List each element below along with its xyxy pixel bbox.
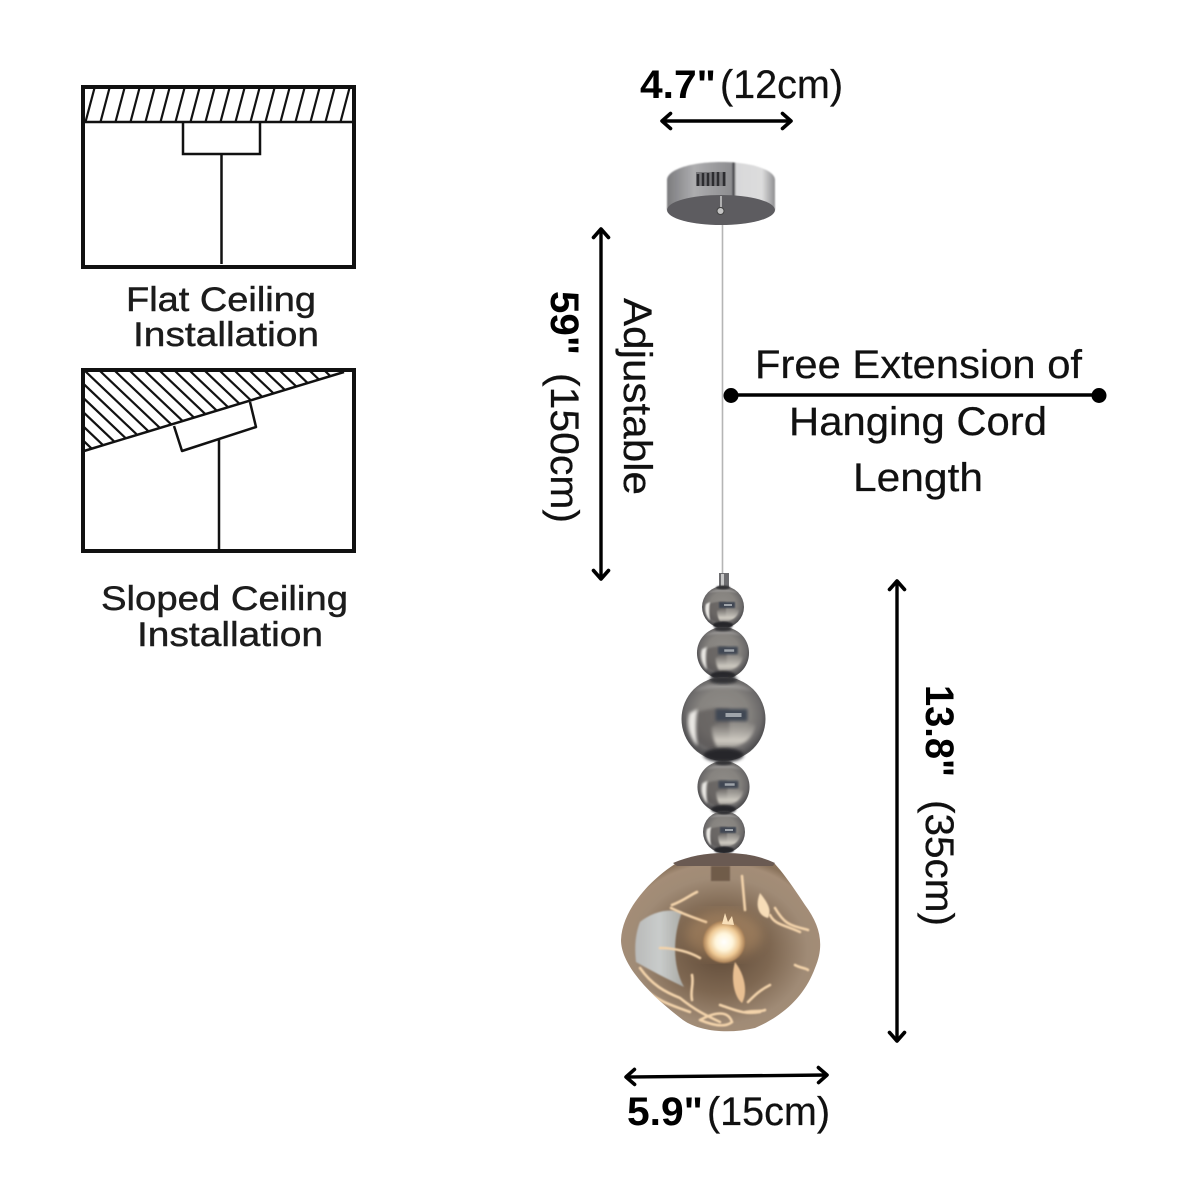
- leader line: [724, 388, 1106, 403]
- arrow: pendant height: [895, 581, 899, 1041]
- diagram: flat ceiling: [83, 87, 354, 267]
- text: adjustable: Adjustable: [615, 298, 659, 495]
- icon: glowing bulb: [703, 913, 745, 963]
- label: flat ceiling: Flat Ceiling: [126, 281, 316, 319]
- text: 13.8 inch: 13.8": [917, 685, 961, 777]
- text: free extension: Free Extension of: [755, 343, 1083, 387]
- arrow: canopy width: [662, 119, 791, 123]
- callout: free extension of hanging cord: [724, 343, 1106, 500]
- label: sloped ceiling: Sloped Ceiling: [101, 580, 348, 618]
- bead 2: [697, 626, 749, 680]
- text: 59 inch: (150cm): [542, 373, 586, 523]
- hanging cord: [722, 212, 724, 575]
- panel: sloped ceiling installation: [81, 368, 356, 646]
- label: flat ceiling: Installation: [133, 316, 319, 354]
- bead 5: [703, 810, 745, 854]
- text: free extension: Length: [853, 456, 983, 500]
- bead 4: [697, 760, 750, 814]
- text: 4.7 inch: 4.7": [640, 63, 716, 107]
- panel: flat ceiling installation: [83, 87, 354, 354]
- bead 1: [702, 586, 744, 628]
- dimension: globe width: [626, 1075, 830, 1134]
- text: 5.9 inch: (15cm): [707, 1090, 830, 1134]
- text: 59 inch: 59": [542, 291, 586, 355]
- dimension: canopy width: [640, 63, 843, 121]
- icon: ceiling canopy: [667, 162, 775, 225]
- label: sloped ceiling: Installation: [137, 616, 323, 654]
- glass globe shade: [621, 853, 820, 1031]
- bead 3: [682, 676, 766, 762]
- arrow: cord length: [599, 229, 603, 579]
- text: 5.9 inch: 5.9": [627, 1090, 703, 1134]
- diagram: sloped ceiling: [81, 368, 356, 553]
- shade top plate: [673, 853, 775, 866]
- dimension: pendant height: [897, 581, 961, 1041]
- dimension: cord length: [542, 229, 659, 579]
- text: 13.8 inch: (35cm): [917, 800, 961, 926]
- text: 4.7 inch: (12cm): [720, 63, 843, 107]
- pendant beads: [682, 573, 766, 854]
- text: free extension: Hanging Cord: [789, 400, 1047, 444]
- arrow: globe width: [626, 1075, 827, 1077]
